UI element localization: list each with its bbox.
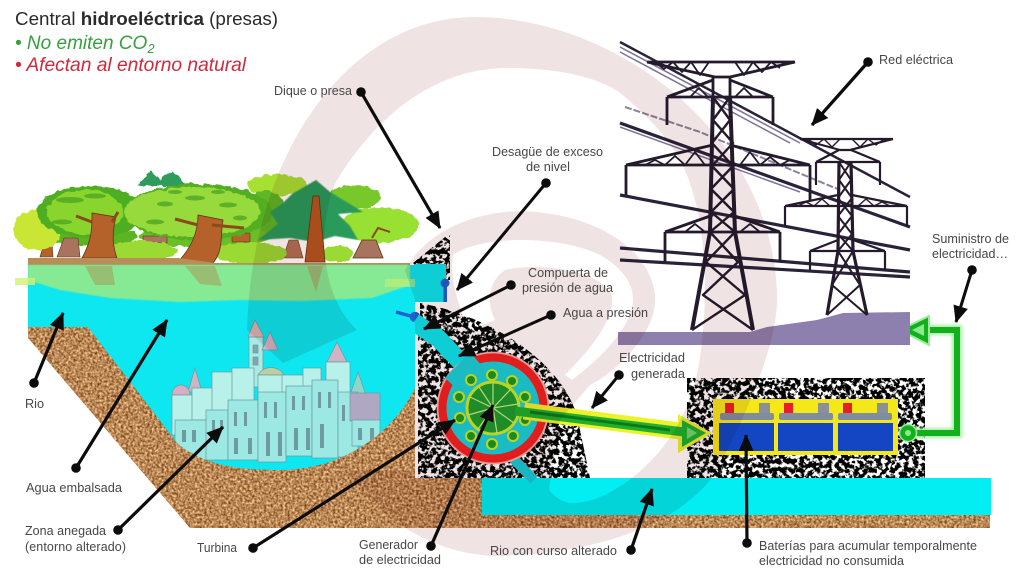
back canopies (42, 171, 381, 247)
negative terminals (759, 403, 888, 413)
houses middle row (175, 380, 380, 462)
pine tree foliage (258, 180, 363, 242)
label: electricidad generada: Electricidad (619, 351, 685, 365)
label: compuerta: presión de agua (522, 281, 613, 295)
supply arrow (900, 316, 957, 442)
label: zona anegada (25, 524, 126, 554)
label: turbina: Turbina (197, 541, 237, 555)
buckets (454, 370, 530, 449)
powerhouse rock (418, 303, 590, 478)
arrow: agua a presion (459, 310, 556, 356)
arrow: electricidad generada (592, 370, 624, 408)
arrow: dique o presa (356, 87, 440, 228)
windows (182, 392, 374, 456)
label: electricidad generada: generada (631, 367, 685, 381)
overflow water channel (415, 264, 446, 302)
arrow: compuerta (424, 280, 516, 329)
title block (15, 8, 278, 76)
rotor (467, 382, 519, 434)
watermark (247, 17, 777, 556)
faded wires (625, 107, 840, 190)
overflow gate (440, 278, 450, 302)
turbine (438, 352, 548, 464)
watermark ring (247, 17, 777, 556)
large pylon truss bracing (645, 62, 790, 232)
arrow: red electrica (812, 57, 873, 125)
watermark interior white area (325, 68, 705, 503)
label: compuerta (522, 266, 613, 295)
houses back row (172, 362, 350, 435)
arrow: zona anegada (113, 427, 223, 535)
label: dique: Dique o presa (274, 84, 352, 98)
arrow: desague (457, 178, 551, 290)
right reflection strip (385, 279, 415, 287)
benefit: 2 (146, 41, 155, 56)
label: suministro: Suministro de (932, 232, 1009, 246)
arrow: agua embalsada (71, 320, 167, 473)
title: Central hidroeléctrica (presas) (15, 8, 278, 29)
battery tops (720, 413, 892, 420)
trunks (76, 196, 390, 263)
pressure water channel (414, 322, 470, 372)
label: rio: Rio (25, 397, 44, 411)
electrical grid (618, 42, 910, 345)
label: desague: de nivel (526, 160, 570, 174)
label: compuerta: Compuerta de (528, 266, 608, 280)
label: desague (492, 145, 603, 174)
label: electricidad generada (619, 351, 685, 381)
large pylon lattice (692, 97, 753, 330)
label: suministro (932, 232, 1009, 261)
shrubs (103, 241, 354, 264)
drawback: • Afectan al entorno natural (15, 55, 247, 76)
small pylon body (827, 162, 867, 315)
casing highlight (438, 352, 548, 464)
generated electricity arrow (515, 411, 712, 453)
reflected band edge (15, 278, 35, 285)
canopy flecks (52, 190, 247, 224)
large pylon crossarms (626, 62, 810, 262)
label: zona anegada: Zona anegada (25, 524, 106, 538)
arrow: suministro (956, 265, 977, 322)
label: agua embalsada: Agua embalsada (26, 481, 122, 495)
battery housing rock (687, 378, 925, 478)
small pylon (785, 139, 907, 315)
label: red electrica: Red eléctrica (879, 53, 953, 67)
forest reflection on the water (15, 265, 415, 302)
river with altered course (482, 478, 991, 515)
small pylon bracing (798, 139, 890, 206)
river bank (28, 258, 410, 265)
red casing (442, 357, 544, 459)
casing water gap (445, 352, 482, 392)
label: agua a presion: Agua a presión (563, 306, 648, 320)
arrow: generador (426, 405, 493, 551)
small pylon crossarms (785, 139, 907, 270)
label: generador (359, 538, 441, 567)
trunk reflections (85, 266, 323, 292)
reservoir water (28, 265, 415, 470)
label: rio con curso alterado: Rio con curso alterado (490, 544, 617, 558)
small pylon lattice (827, 162, 867, 315)
flooded town (172, 320, 380, 462)
ground: brown soil (28, 327, 990, 528)
power lines (620, 42, 910, 277)
label: generador: de electricidad (359, 553, 441, 567)
watermark shield highlight (452, 240, 633, 380)
arrow: turbina (248, 420, 455, 553)
positive terminals (725, 403, 852, 413)
battery cells (719, 423, 893, 451)
pressure gate (396, 312, 418, 320)
label: baterias: electricidad no consumida (759, 554, 904, 568)
arrow: rio con curso alterado (626, 489, 652, 555)
back trunks (40, 233, 303, 258)
large pylon (626, 62, 810, 330)
spires (188, 332, 366, 395)
label: zona anegada: (entorno alterado) (25, 540, 126, 554)
label: baterias (759, 539, 977, 568)
large pylon body (692, 97, 753, 330)
arrow: rio (29, 313, 63, 388)
turbine outlet (500, 445, 534, 480)
dam (413, 233, 450, 280)
label: suministro: electricidad… (932, 247, 1008, 261)
batteries (713, 399, 898, 455)
front canopies (13, 184, 419, 250)
benefit: • No emiten CO (15, 33, 147, 54)
label: baterias: Baterías para acumular temporalmente (759, 539, 977, 553)
domes (172, 367, 284, 396)
tall tower (248, 320, 264, 387)
forest (13, 171, 419, 265)
arrow: baterias (742, 435, 752, 548)
label: generador: Generador (359, 538, 418, 552)
label: desague: Desagüe de exceso (492, 145, 603, 159)
ground under pylons (618, 312, 910, 345)
rotor blades (468, 383, 518, 433)
